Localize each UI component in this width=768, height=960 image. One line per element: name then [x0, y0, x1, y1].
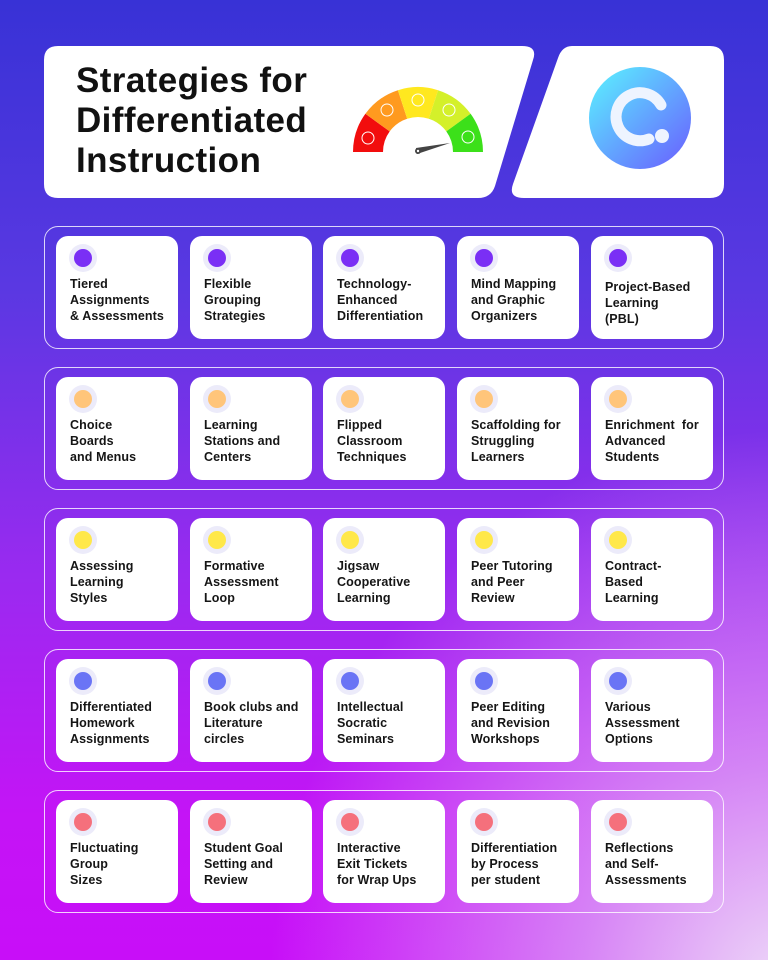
- card: (PBL): [605, 312, 639, 326]
- card: Assessment: [204, 575, 279, 589]
- card: Tiered: [70, 277, 108, 291]
- card: Technology-: [337, 277, 411, 291]
- card: Formative: [204, 559, 265, 573]
- card: [457, 800, 579, 903]
- card: Seminars: [337, 732, 394, 746]
- card: Learners: [471, 450, 525, 464]
- card: Learning: [337, 591, 391, 605]
- card: Literature: [204, 716, 263, 730]
- card: Assignments: [70, 732, 150, 746]
- card: [457, 518, 579, 621]
- card: Various: [605, 700, 651, 714]
- card: Book clubs and: [204, 700, 298, 714]
- card: Choice: [70, 418, 112, 432]
- card: and Graphic: [471, 293, 545, 307]
- panel: row 1: [44, 226, 724, 349]
- card: Classroom: [337, 434, 403, 448]
- card: Jigsaw: [337, 559, 379, 573]
- card: Interactive: [337, 841, 401, 855]
- card: Learning: [204, 418, 258, 432]
- card: Differentiation: [337, 309, 423, 323]
- card: [56, 518, 178, 621]
- card: [56, 659, 178, 762]
- card: Sizes: [70, 873, 102, 887]
- card: Assessing: [70, 559, 133, 573]
- card: Flexible: [204, 277, 251, 291]
- card: Mind Mapping: [471, 277, 556, 291]
- card: Assessments: [605, 873, 687, 887]
- title: Instruction: [76, 141, 261, 180]
- card: [591, 377, 713, 480]
- card: [323, 659, 445, 762]
- card: Homework: [70, 716, 135, 730]
- panel: row 2: [44, 367, 724, 490]
- card: [323, 518, 445, 621]
- card: Centers: [204, 450, 251, 464]
- card: [591, 659, 713, 762]
- card: Techniques: [337, 450, 407, 464]
- panel: row 4: [44, 649, 724, 772]
- card: [56, 236, 178, 339]
- title: Strategies for: [76, 61, 307, 100]
- card: Project-Based: [605, 280, 690, 294]
- card: [323, 236, 445, 339]
- panel: row 5: [44, 790, 724, 913]
- card: Fluctuating: [70, 841, 138, 855]
- card: Assignments: [70, 293, 150, 307]
- card: Cooperative: [337, 575, 410, 589]
- card: [190, 518, 312, 621]
- card: Peer Tutoring: [471, 559, 553, 573]
- card: Based: [605, 575, 643, 589]
- card: [190, 236, 312, 339]
- card: [56, 800, 178, 903]
- card: circles: [204, 732, 244, 746]
- card: Reflections: [605, 841, 673, 855]
- card: & Assessments: [70, 309, 164, 323]
- card: Student Goal: [204, 841, 283, 855]
- card: Strategies: [204, 309, 265, 323]
- card: [457, 377, 579, 480]
- card: Organizers: [471, 309, 537, 323]
- card: for Wrap Ups: [337, 873, 416, 887]
- card: Loop: [204, 591, 235, 605]
- card: Grouping: [204, 293, 261, 307]
- card: Options: [605, 732, 653, 746]
- card: [56, 377, 178, 480]
- card: [323, 377, 445, 480]
- title: Differentiated: [76, 101, 307, 140]
- card: Boards: [70, 434, 114, 448]
- header panel: title: [44, 46, 724, 198]
- card: per student: [471, 873, 540, 887]
- card: Advanced: [605, 434, 666, 448]
- card: Students: [605, 450, 659, 464]
- card: Learning: [605, 296, 659, 310]
- card: [190, 377, 312, 480]
- card: Stations and: [204, 434, 280, 448]
- card: Scaffolding for: [471, 418, 561, 432]
- card: and Revision: [471, 716, 550, 730]
- card: [591, 236, 713, 339]
- card: Review: [471, 591, 515, 605]
- card: [190, 659, 312, 762]
- card: Exit Tickets: [337, 857, 407, 871]
- card: Setting and: [204, 857, 273, 871]
- card: Contract-: [605, 559, 661, 573]
- card: [323, 800, 445, 903]
- card: Learning: [70, 575, 124, 589]
- icon: logo: [589, 67, 691, 169]
- card: and Self-: [605, 857, 659, 871]
- card: Review: [204, 873, 248, 887]
- card: Struggling: [471, 434, 534, 448]
- card: Group: [70, 857, 108, 871]
- card: [591, 518, 713, 621]
- card: and Peer: [471, 575, 525, 589]
- card: Styles: [70, 591, 107, 605]
- card: Enrichment for: [605, 418, 699, 432]
- card: Differentiation: [471, 841, 557, 855]
- card: by Process: [471, 857, 539, 871]
- card: Socratic: [337, 716, 387, 730]
- card: Learning: [605, 591, 659, 605]
- title: [76, 61, 307, 180]
- card: [591, 800, 713, 903]
- card: [190, 800, 312, 903]
- card: Assessment: [605, 716, 680, 730]
- panel: row 3: [44, 508, 724, 631]
- icon: gauge: [353, 86, 483, 154]
- card: Flipped: [337, 418, 382, 432]
- card: and Menus: [70, 450, 136, 464]
- card: Workshops: [471, 732, 540, 746]
- card: [457, 659, 579, 762]
- card: Intellectual: [337, 700, 404, 714]
- card: Differentiated: [70, 700, 152, 714]
- card: [457, 236, 579, 339]
- card: Peer Editing: [471, 700, 545, 714]
- card: Enhanced: [337, 293, 398, 307]
